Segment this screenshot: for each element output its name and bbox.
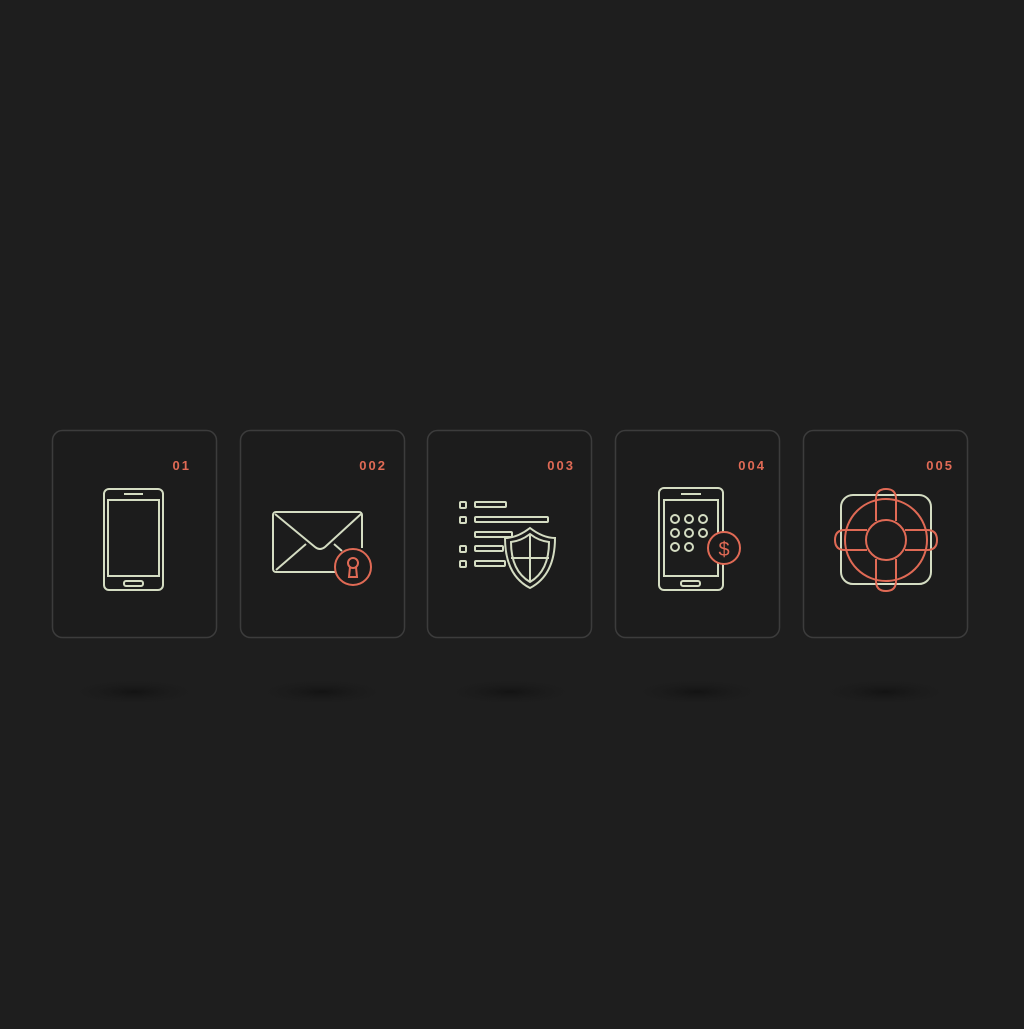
- card shadows: [64, 678, 955, 706]
- icon: phone: [104, 489, 163, 590]
- card 5: life ring: [804, 430, 968, 638]
- number 004: 004: [738, 458, 766, 473]
- icon: life ring: [835, 489, 937, 591]
- card 2: envelope lock: [240, 430, 404, 638]
- icon: list with shield: [460, 502, 555, 588]
- card 3: list shield: [428, 430, 592, 638]
- card 4: phone payment: [616, 430, 780, 638]
- number 01: 01: [173, 458, 191, 473]
- icon: phone with dollar: [659, 488, 740, 590]
- number 003: 003: [547, 458, 575, 473]
- number 002: 002: [359, 458, 387, 473]
- icon: phone with dollar: $: [718, 539, 730, 561]
- card 1: phone: [52, 430, 216, 638]
- icon: envelope with lock: [273, 512, 371, 585]
- number 005: 005: [926, 458, 954, 473]
